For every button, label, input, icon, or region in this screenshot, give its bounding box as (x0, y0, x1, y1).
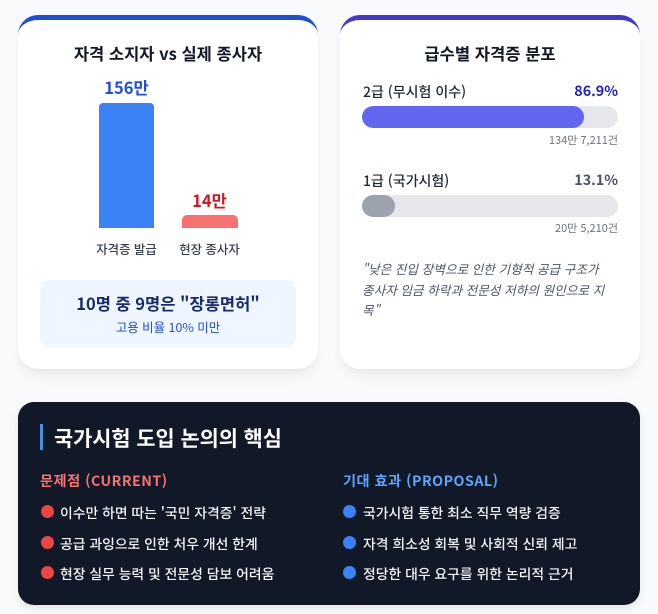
quote (362, 259, 606, 319)
row count: grade 2: 134만 7,211건 (549, 132, 618, 148)
item text: 이수만 하면 따는 '국민 자격증' 전략 (60, 502, 266, 522)
callout headline: 10명 중 9명은 "장롱면허" (76, 291, 260, 315)
column: current problems (40, 471, 274, 583)
item text: 정당한 대우 요구를 위한 논리적 근거 (363, 563, 573, 583)
bullet (343, 566, 356, 579)
callout (40, 280, 296, 347)
bullet (41, 536, 54, 549)
panel: distribution by grade (340, 15, 640, 369)
column heading: 기대 효과 (PROPOSAL) (343, 471, 498, 491)
quote: 종사자 임금 하락과 전문성 저하의 원인으로 지 (362, 280, 604, 298)
panel: qualification holders vs workers (18, 15, 318, 369)
panel: key points of national exam debate (18, 402, 640, 605)
list item 3 (343, 563, 573, 583)
column: expected effects (343, 471, 577, 583)
row label: grade 2: 2급 (무시험 이수) (363, 82, 466, 102)
bullet (41, 566, 54, 579)
row value: 86.9%: 86.9% (574, 80, 618, 101)
item text: 공급 과잉으로 인한 처우 개선 한계 (60, 533, 258, 553)
item text: 자격 희소성 회복 및 사회적 신뢰 제고 (363, 533, 577, 553)
list item 1 (343, 502, 561, 522)
quote: 목" (362, 300, 380, 319)
bar value: 156만: 156만 (104, 75, 149, 99)
bar value: 14만: 14만 (192, 188, 227, 212)
item text: 현장 실무 능력 및 전문성 담보 어려움 (60, 563, 274, 583)
list item 1 (41, 502, 266, 522)
item text: 국가시험 통한 최소 직무 역량 검증 (363, 502, 561, 522)
heading accent bar (40, 424, 43, 450)
row count: grade 1: 20만 5,210건 (555, 220, 618, 236)
row label: grade 1: 1급 (국가시험) (363, 170, 449, 190)
heading: 급수별 자격증 분포 (424, 41, 556, 65)
progress bar: grade 2 (362, 106, 618, 128)
bar label: field workers: 현장 종사자 (179, 240, 240, 258)
heading: 자격 소지자 vs 실제 종사자 (74, 41, 262, 65)
row value: 13.1%: 13.1% (574, 169, 618, 190)
bullet (343, 505, 356, 518)
heading: 국가시험 도입 논의의 핵심 (54, 422, 282, 452)
list item 3 (41, 563, 274, 583)
column heading: 문제점 (CURRENT) (40, 471, 168, 491)
bar: field workers (182, 215, 238, 228)
list item 2 (343, 533, 577, 553)
bullet (41, 505, 54, 518)
bullet (343, 536, 356, 549)
progress fill: 13.1% (362, 195, 395, 217)
bar: certificates issued (99, 103, 154, 228)
progress fill: 86.9% (362, 106, 584, 128)
quote: "낮은 진입 장벽으로 인한 기형적 공급 구조가 (362, 259, 599, 278)
bar label: certificates issued: 자격증 발급 (96, 240, 157, 258)
list item 2 (41, 533, 258, 553)
callout subtext: 고용 비율 10% 미만 (116, 318, 220, 336)
progress bar: grade 1 (362, 195, 618, 217)
